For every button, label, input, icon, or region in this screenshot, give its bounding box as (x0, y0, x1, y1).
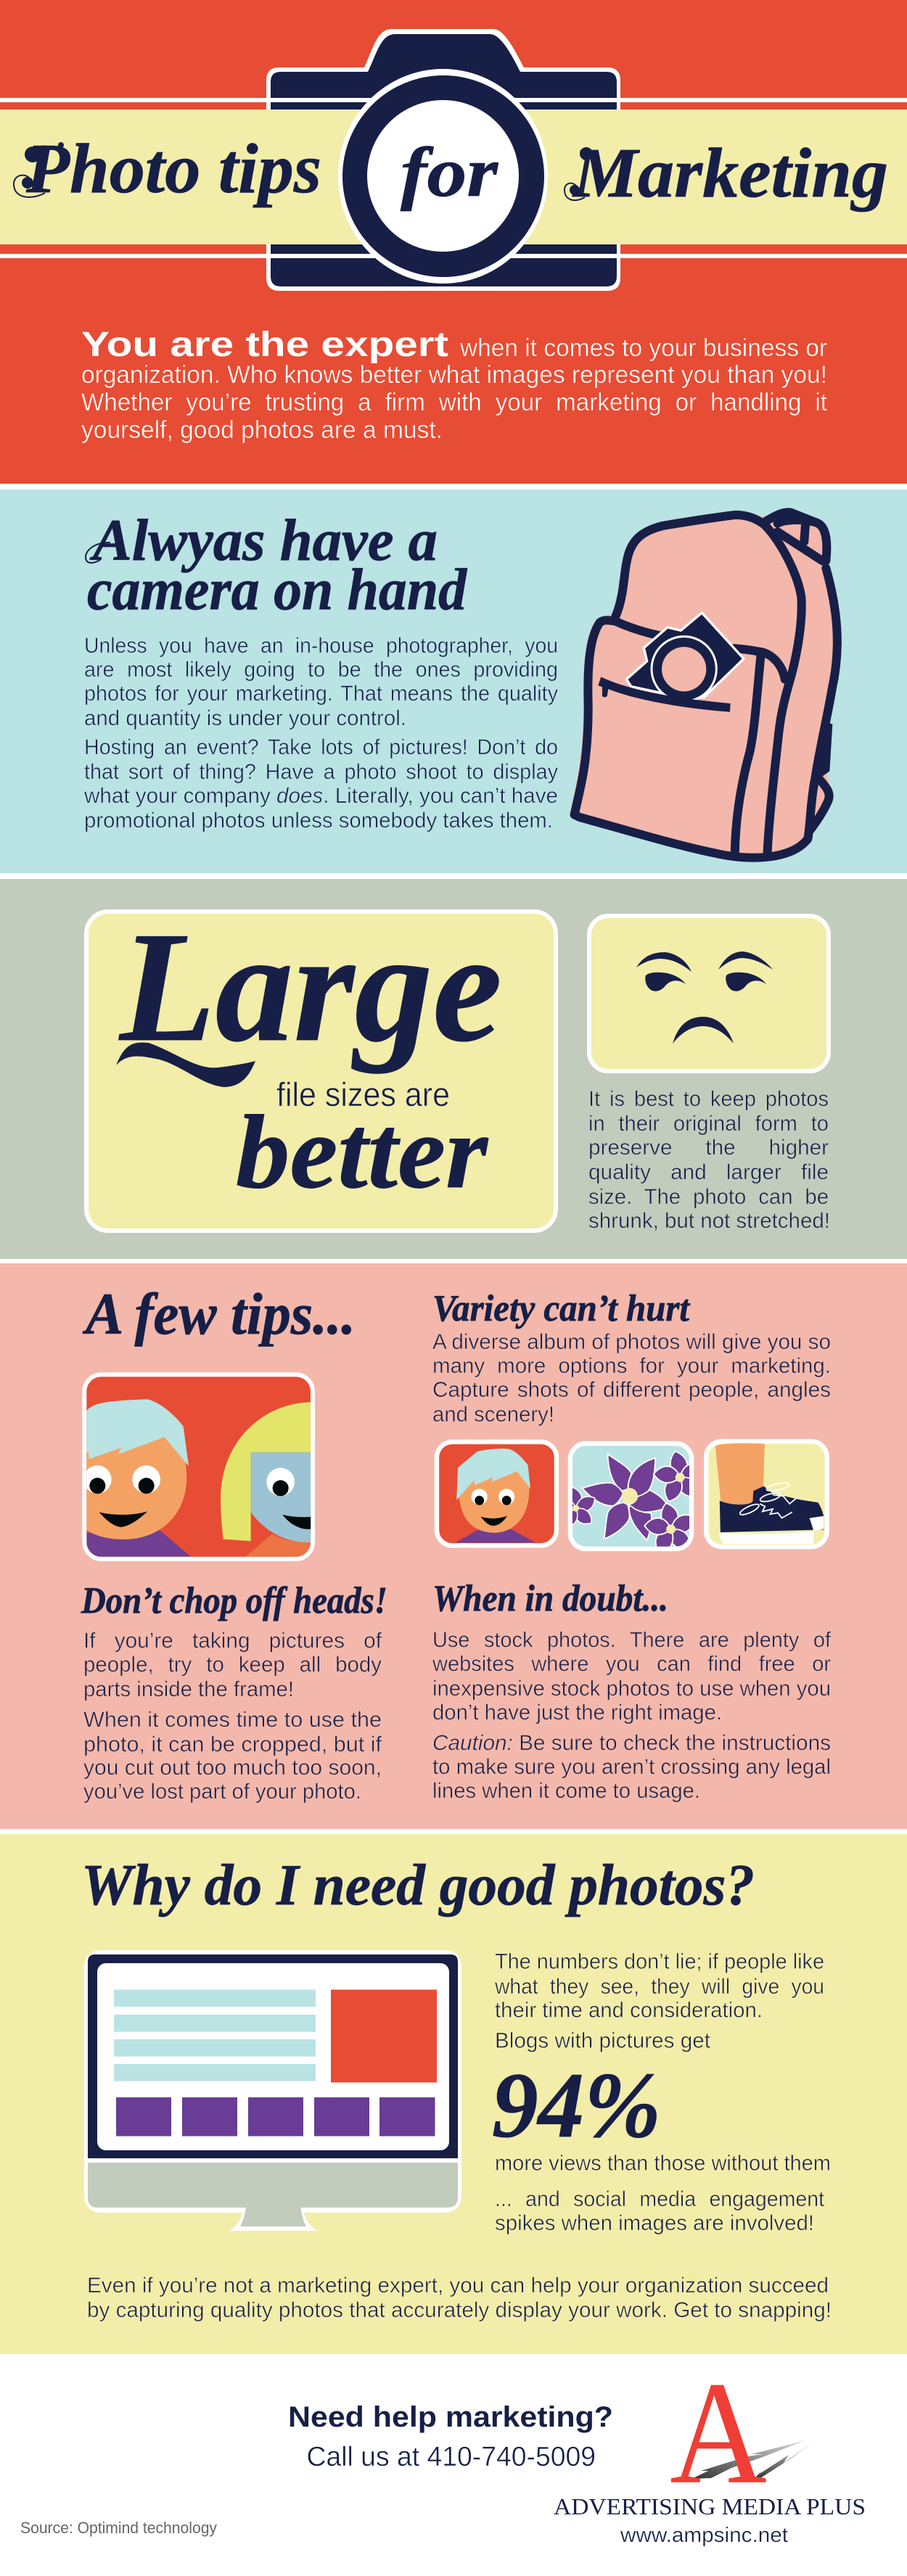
heading: Why do I need good photos? (81, 1854, 755, 1917)
logo: Advertising Media Plus: A (670, 2351, 767, 2514)
heading: variety: Variety can’t hurt (432, 1288, 690, 1329)
text: variety (432, 1330, 831, 1427)
screen: thumbnails (116, 2097, 435, 2137)
body text: size. The photo can be (588, 1185, 829, 1209)
text: stat caption: ... and social media engagement (495, 2187, 825, 2211)
logo: Advertising Media Plus (554, 2351, 866, 2547)
text: variety: Capture shots of different people, angles (432, 1378, 831, 1402)
text: when in doubt (432, 1628, 832, 1803)
panel: footer (0, 2351, 907, 2576)
body text: It is best to keep photos (588, 1087, 829, 1111)
text: closing (87, 2274, 832, 2322)
text: don't chop off heads: parts inside the frame! (83, 1677, 294, 1701)
body text (83, 634, 558, 833)
title flourish: M curls (565, 147, 593, 200)
panel: always have a camera on hand (0, 490, 907, 873)
text: closing: Even if you’re not a marketing expert, you can help your organization succeed (87, 2274, 829, 2298)
stat: 94%: 94% (492, 2053, 661, 2157)
text: variety: and scenery! (432, 1403, 554, 1427)
icon: sad face card (589, 916, 829, 1071)
text: don't chop off heads: people, try to keep all body (83, 1653, 382, 1677)
heading: when in doubt: When in doubt... (432, 1578, 668, 1619)
panel: large file sizes (0, 879, 907, 1259)
text: stat caption: spikes when images are involved! (495, 2211, 814, 2235)
text: when in doubt: Use stock photos. There are plenty of (432, 1628, 832, 1652)
text: numbers: Blogs with pictures get (495, 2029, 711, 2052)
title band stripes (0, 98, 907, 258)
source: Source: Optimind technology (20, 2519, 217, 2537)
intro text: when it comes to your business or (459, 334, 827, 362)
text: stat caption: more views than those without them (495, 2151, 831, 2176)
image: two cropped faces (83, 1374, 313, 1559)
intro text (81, 326, 828, 444)
icon: computer monitor (84, 1950, 461, 2231)
text: don't chop off heads: photo, it can be cropped, but if (83, 1733, 382, 1756)
intro text: You are the expert (81, 326, 448, 364)
card: large file sizes are better: Large (118, 900, 502, 1075)
body text: preserve the higher (588, 1136, 829, 1160)
text: stat caption (495, 2151, 831, 2235)
text: when in doubt: websites where you can find free or (432, 1652, 831, 1676)
body text: that sort of thing? Have a photo shoot to display (84, 760, 558, 784)
title: Photo tips (25, 130, 321, 208)
panel: why do I need good photos (0, 1834, 907, 2354)
logo: Advertising Media Plus: www.ampsinc.net (620, 2524, 788, 2547)
body text (588, 1087, 830, 1233)
text: don't chop off heads: you’ve lost part of your photo. (83, 1780, 361, 1804)
intro text: organization. Who knows better what images represent you than you! (81, 361, 827, 389)
text: variety: many more options for your marketing. (432, 1354, 831, 1378)
call to action (288, 2401, 613, 2472)
body text: in their original form to (588, 1112, 829, 1136)
card: large file sizes are better (86, 900, 556, 1231)
panel: header (0, 0, 907, 484)
body text: shrunk, but not stretched! (588, 1209, 830, 1233)
heading: don't chop off heads: Don’t chop off heads! (81, 1580, 387, 1622)
title: for (401, 133, 498, 212)
body text: Unless you have an in-house photographer, you (84, 634, 558, 658)
intro text: yourself, good photos are a must. (81, 416, 443, 444)
text: when in doubt: inexpensive stock photos to use when you (432, 1677, 831, 1701)
images: album thumbnails (437, 1441, 827, 1556)
logo: Advertising Media Plus: ADVERTISING MEDIA PLUS (554, 2493, 866, 2519)
thumbnail: flowers (567, 1441, 694, 1551)
text: when in doubt: lines when it come to usage. (432, 1779, 700, 1803)
body text: and quantity is under your control. (84, 706, 406, 730)
heading (86, 507, 467, 622)
body text: Hosting an event? Take lots of pictures! Don’t do (84, 735, 558, 759)
text: when in doubt: Caution: Be sure to check the instructions (432, 1731, 831, 1755)
screen: image block (331, 1990, 437, 2083)
text: don't chop off heads (83, 1629, 382, 1804)
card: large file sizes are better: file sizes are (276, 1076, 450, 1113)
call to action: Call us at 410-740-5009 (306, 2442, 596, 2472)
heading: camera on hand (87, 556, 467, 622)
text: numbers: their time and consideration. (495, 1999, 763, 2022)
title (14, 130, 888, 212)
title: Marketing (572, 134, 888, 212)
text: numbers: The numbers don’t lie; if people like (495, 1949, 824, 1974)
call to action: Need help marketing? (288, 2401, 613, 2433)
body text: quality and larger file (588, 1160, 829, 1184)
text: don't chop off heads: If you’re taking pictures of (83, 1629, 382, 1653)
icon: camera body (266, 29, 620, 291)
body text: photos for your marketing. That means the quality (84, 682, 558, 706)
body text: promotional photos unless somebody takes them. (84, 809, 553, 833)
thumbnail: shoe (706, 1441, 827, 1547)
body text: what your company does. Literally, you can’t have (83, 784, 558, 808)
text: numbers: what they see, they will give you (494, 1975, 824, 1999)
body text: are most likely going to be the ones providing (84, 658, 558, 682)
heading: Alwyas have a (89, 507, 438, 573)
text: when in doubt: to make sure you aren’t crossing any legal (432, 1755, 831, 1779)
text: closing: by capturing quality photos that accurately display your work. Get to snapping! (87, 2298, 832, 2322)
text: when in doubt: don’t have just the right image. (432, 1701, 722, 1725)
text: numbers (494, 1949, 824, 2052)
card: large file sizes are better: better (236, 1094, 489, 1210)
text: don't chop off heads: When it comes time to use the (83, 1708, 382, 1732)
text: variety: A diverse album of photos will give you so (432, 1330, 831, 1354)
text: don't chop off heads: you cut out too much too soon, (83, 1756, 382, 1780)
intro text: Whether you’re trusting a firm with your marketing or handling it (81, 389, 828, 416)
thumbnail: boy (437, 1442, 557, 1545)
title flourish: P curls (14, 142, 64, 197)
icon: camera lens (338, 69, 548, 284)
heading: a few tips: A few tips... (82, 1281, 356, 1347)
screen: text bars (114, 1990, 316, 2081)
panel: a few tips (0, 1263, 907, 1829)
icon: backpack with camera (570, 511, 840, 858)
